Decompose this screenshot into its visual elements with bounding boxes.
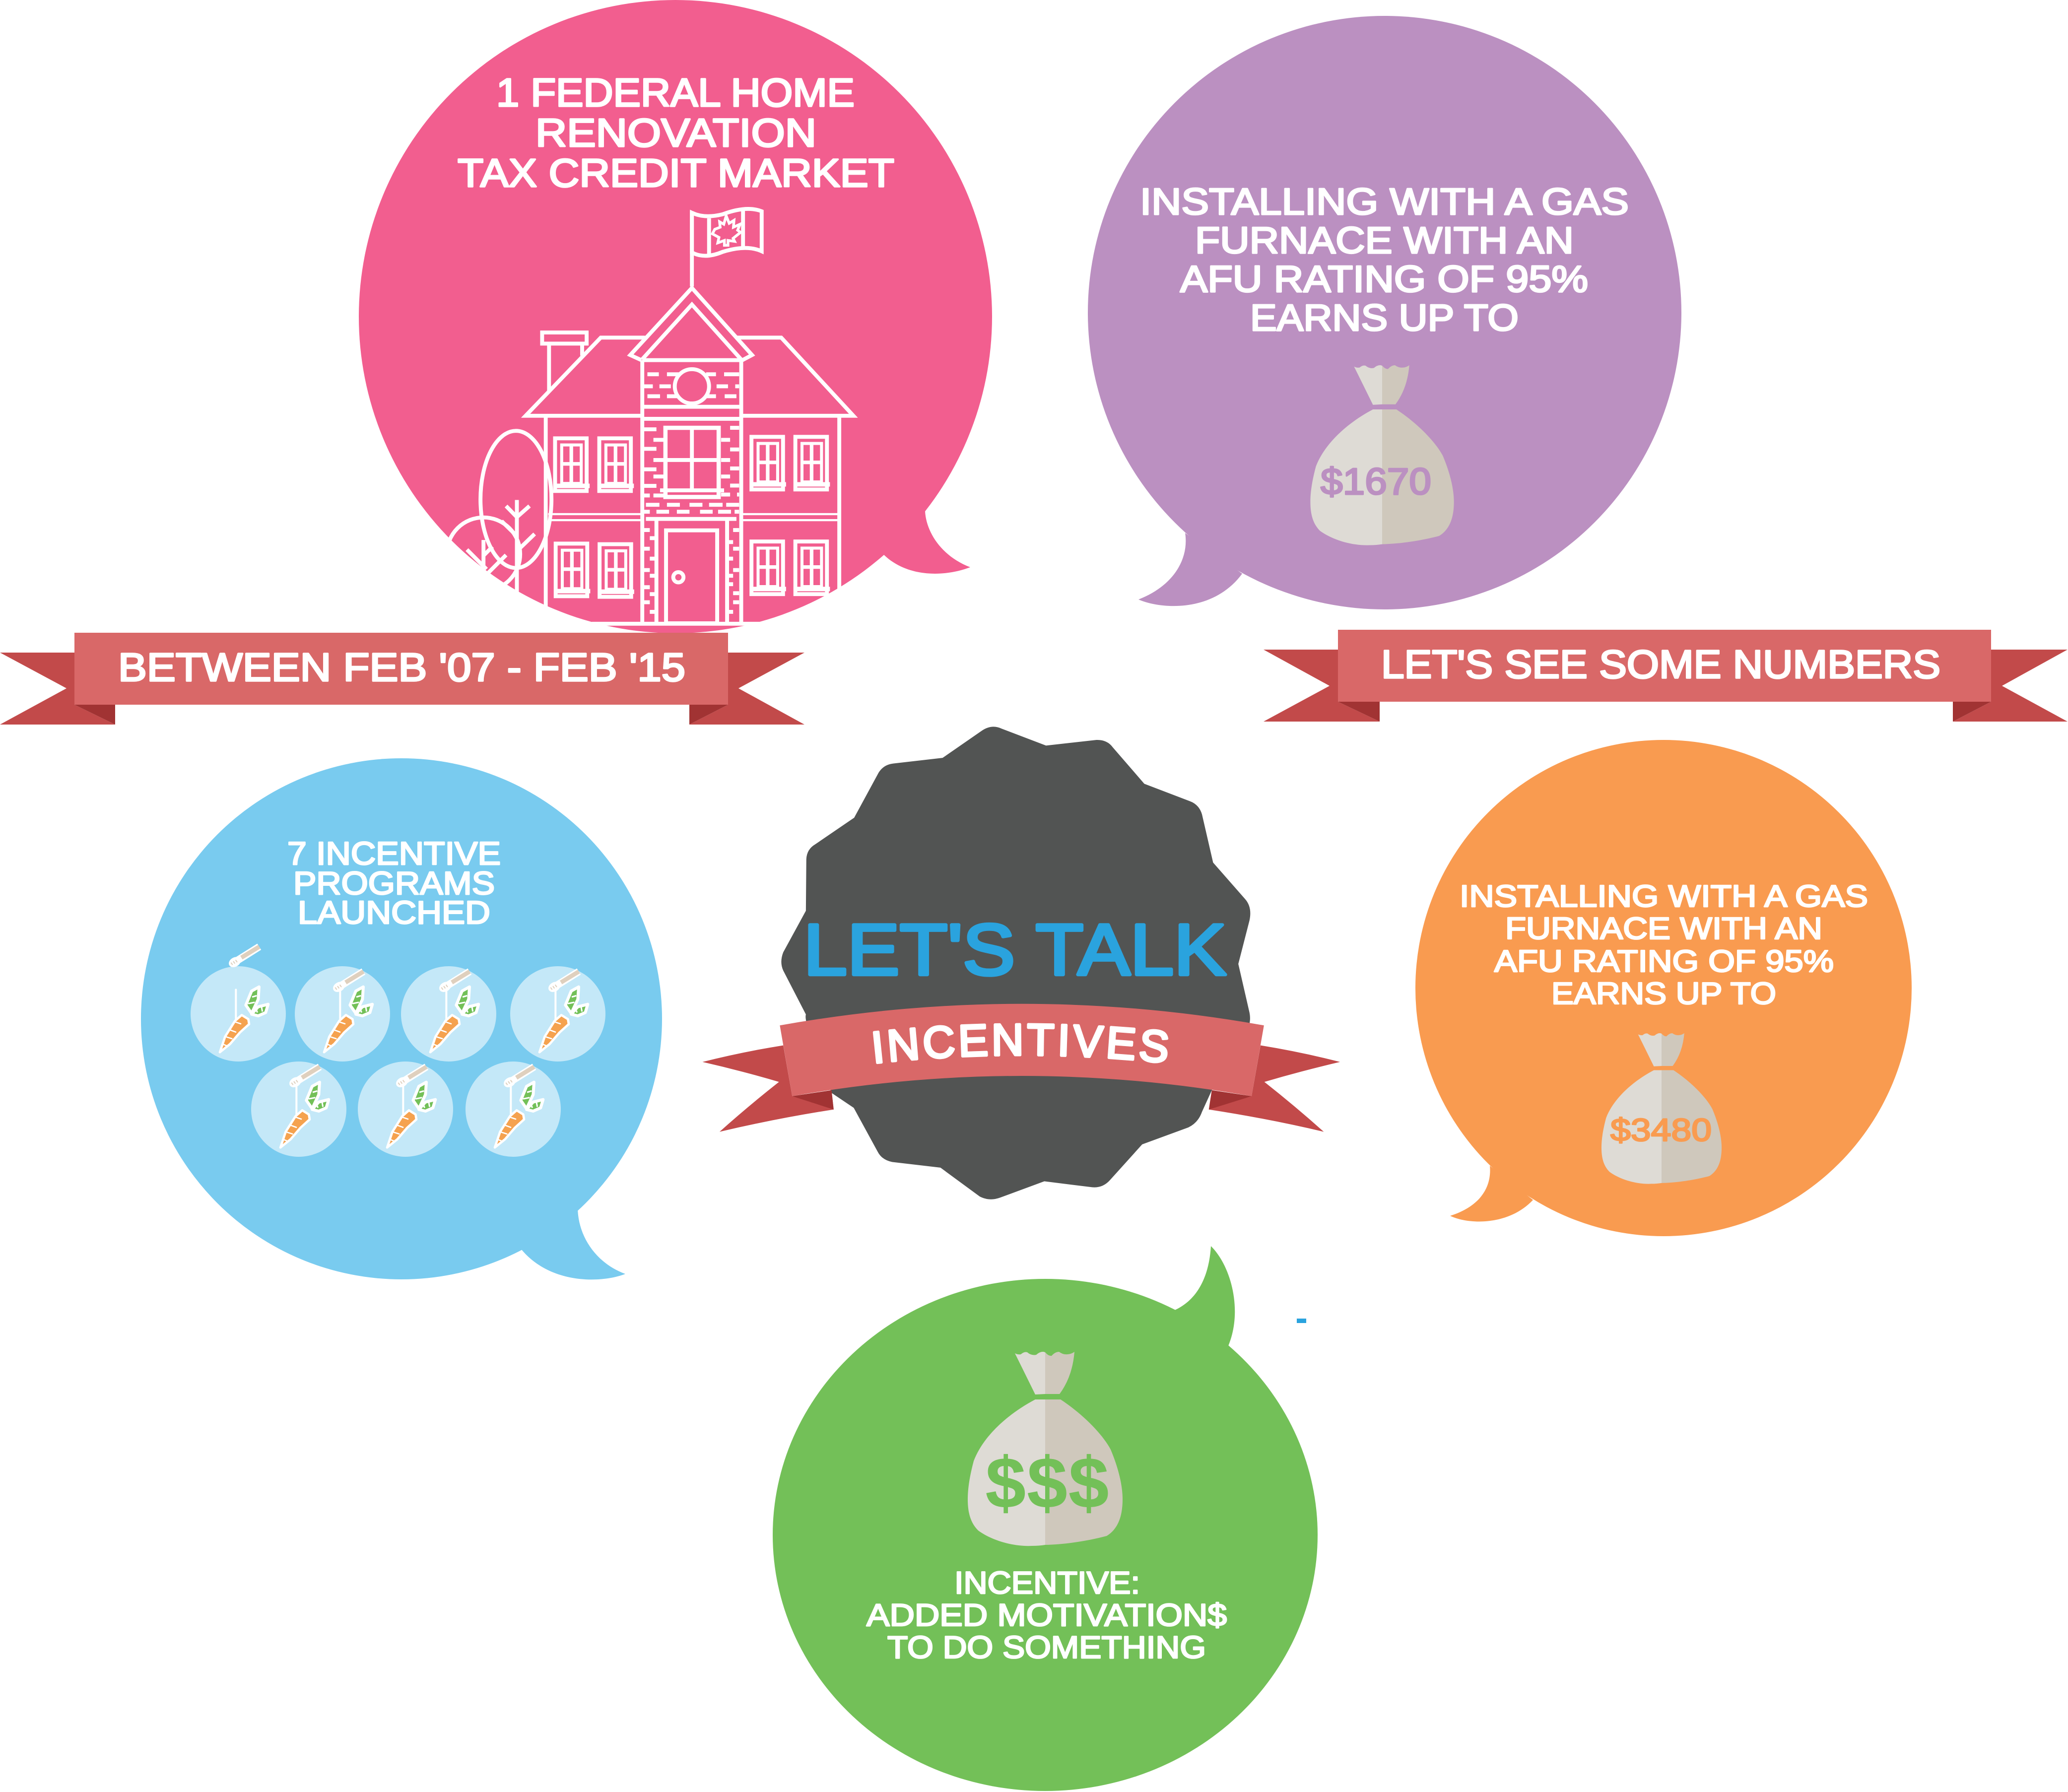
purple bubble text: INSTALLING WITH A GAS <box>1140 181 1629 222</box>
green bubble text: TO DO SOMETHING <box>887 1630 1206 1665</box>
purple bubble text <box>1140 181 1629 338</box>
purple bubble text: FURNACE WITH AN <box>1195 219 1574 261</box>
ribbon tails <box>0 653 804 725</box>
ribbon: let's see some numbers <box>1264 630 2068 722</box>
subtitle: incentives: INCENTIVES <box>872 1023 1168 1064</box>
flag on pole <box>692 209 762 286</box>
icon: carrot on stick 2 <box>295 966 390 1062</box>
green bubble text: INCENTIVE: <box>954 1566 1140 1600</box>
icon: carrot on stick 1 <box>191 947 286 1062</box>
pink bubble heading <box>458 70 894 195</box>
ground line <box>592 622 762 626</box>
ribbon: between Feb 07 - Feb 15 <box>0 633 804 725</box>
purple bubble text: EARNS UP TO <box>1250 297 1519 338</box>
pink bubble heading: RENOVATION <box>535 111 816 155</box>
pink bubble heading: TAX CREDIT MARKET <box>458 151 894 195</box>
blue speech bubble <box>141 758 662 1279</box>
amount 3480: $3480 <box>1610 1112 1712 1148</box>
centre window <box>660 428 724 497</box>
door <box>646 519 736 623</box>
panel: orange bubble gas furnace 3480 <box>1415 740 1912 1236</box>
ribbon band <box>1338 630 1991 702</box>
green speech bubble <box>773 1246 1318 1791</box>
ribbon text: BETWEEN FEB '07 - FEB '15 <box>118 645 685 689</box>
pink speech bubble <box>359 0 992 633</box>
orange bubble text: EARNS UP TO <box>1551 977 1776 1011</box>
orange bubble text <box>1460 879 1868 1011</box>
trees <box>447 431 551 592</box>
orange speech bubble <box>1415 740 1912 1236</box>
icon: money bag <box>968 1352 1123 1546</box>
dollar signs: $$$ <box>986 1443 1109 1523</box>
icon: money bag <box>1601 1033 1722 1184</box>
panel: green bubble incentive definition <box>773 1246 1318 1791</box>
orange bubble text: INSTALLING WITH A GAS <box>1460 879 1868 914</box>
orange bubble text: AFU RATING OF 95% <box>1494 944 1834 979</box>
panel: central badge <box>703 727 1340 1199</box>
blue bubble text: LAUNCHED <box>298 894 490 930</box>
title: let's talk: LET'S TALK <box>803 909 1226 990</box>
green bubble text: ADDED MOTIVATION$ <box>867 1598 1227 1633</box>
small blue dash <box>1297 1319 1306 1323</box>
roof and gable <box>526 288 854 416</box>
curved ribbon <box>702 1004 1340 1132</box>
ribbon tails <box>1264 650 2068 722</box>
purple bubble text: AFU RATING OF 95% <box>1180 258 1588 300</box>
pink bubble heading: 1 FEDERAL HOME <box>496 70 855 115</box>
blue bubble text: PROGRAMS <box>293 865 495 901</box>
windows <box>553 437 830 597</box>
icon: carrot on stick 3 <box>401 966 496 1062</box>
ribbon band <box>74 633 728 705</box>
orange bubble text: FURNACE WITH AN <box>1505 912 1822 946</box>
purple speech bubble <box>1088 16 1681 609</box>
ribbon text: LET'S SEE SOME NUMBERS <box>1381 642 1940 686</box>
panel: purple bubble gas furnace 1670 <box>1088 16 1681 609</box>
house walls and centre tower <box>546 360 839 623</box>
dark scalloped badge <box>781 727 1250 1199</box>
icon: money bag <box>1310 365 1454 545</box>
icon: line drawing of house with Canadian flag <box>447 209 854 626</box>
icon: carrot on stick 4 <box>510 966 605 1062</box>
panel: pink bubble federal tax credit <box>359 0 992 633</box>
icon: carrot on stick 7 <box>466 1062 561 1157</box>
green bubble text <box>867 1566 1227 1665</box>
panel: blue bubble 7 incentive programs <box>141 758 662 1279</box>
icon: carrot on stick 5 <box>251 1062 346 1157</box>
blue bubble text <box>287 835 501 930</box>
amount 1670: $1670 <box>1321 461 1431 502</box>
blue bubble text: 7 INCENTIVE <box>287 835 501 871</box>
icon: carrot on stick 6 <box>358 1062 453 1157</box>
